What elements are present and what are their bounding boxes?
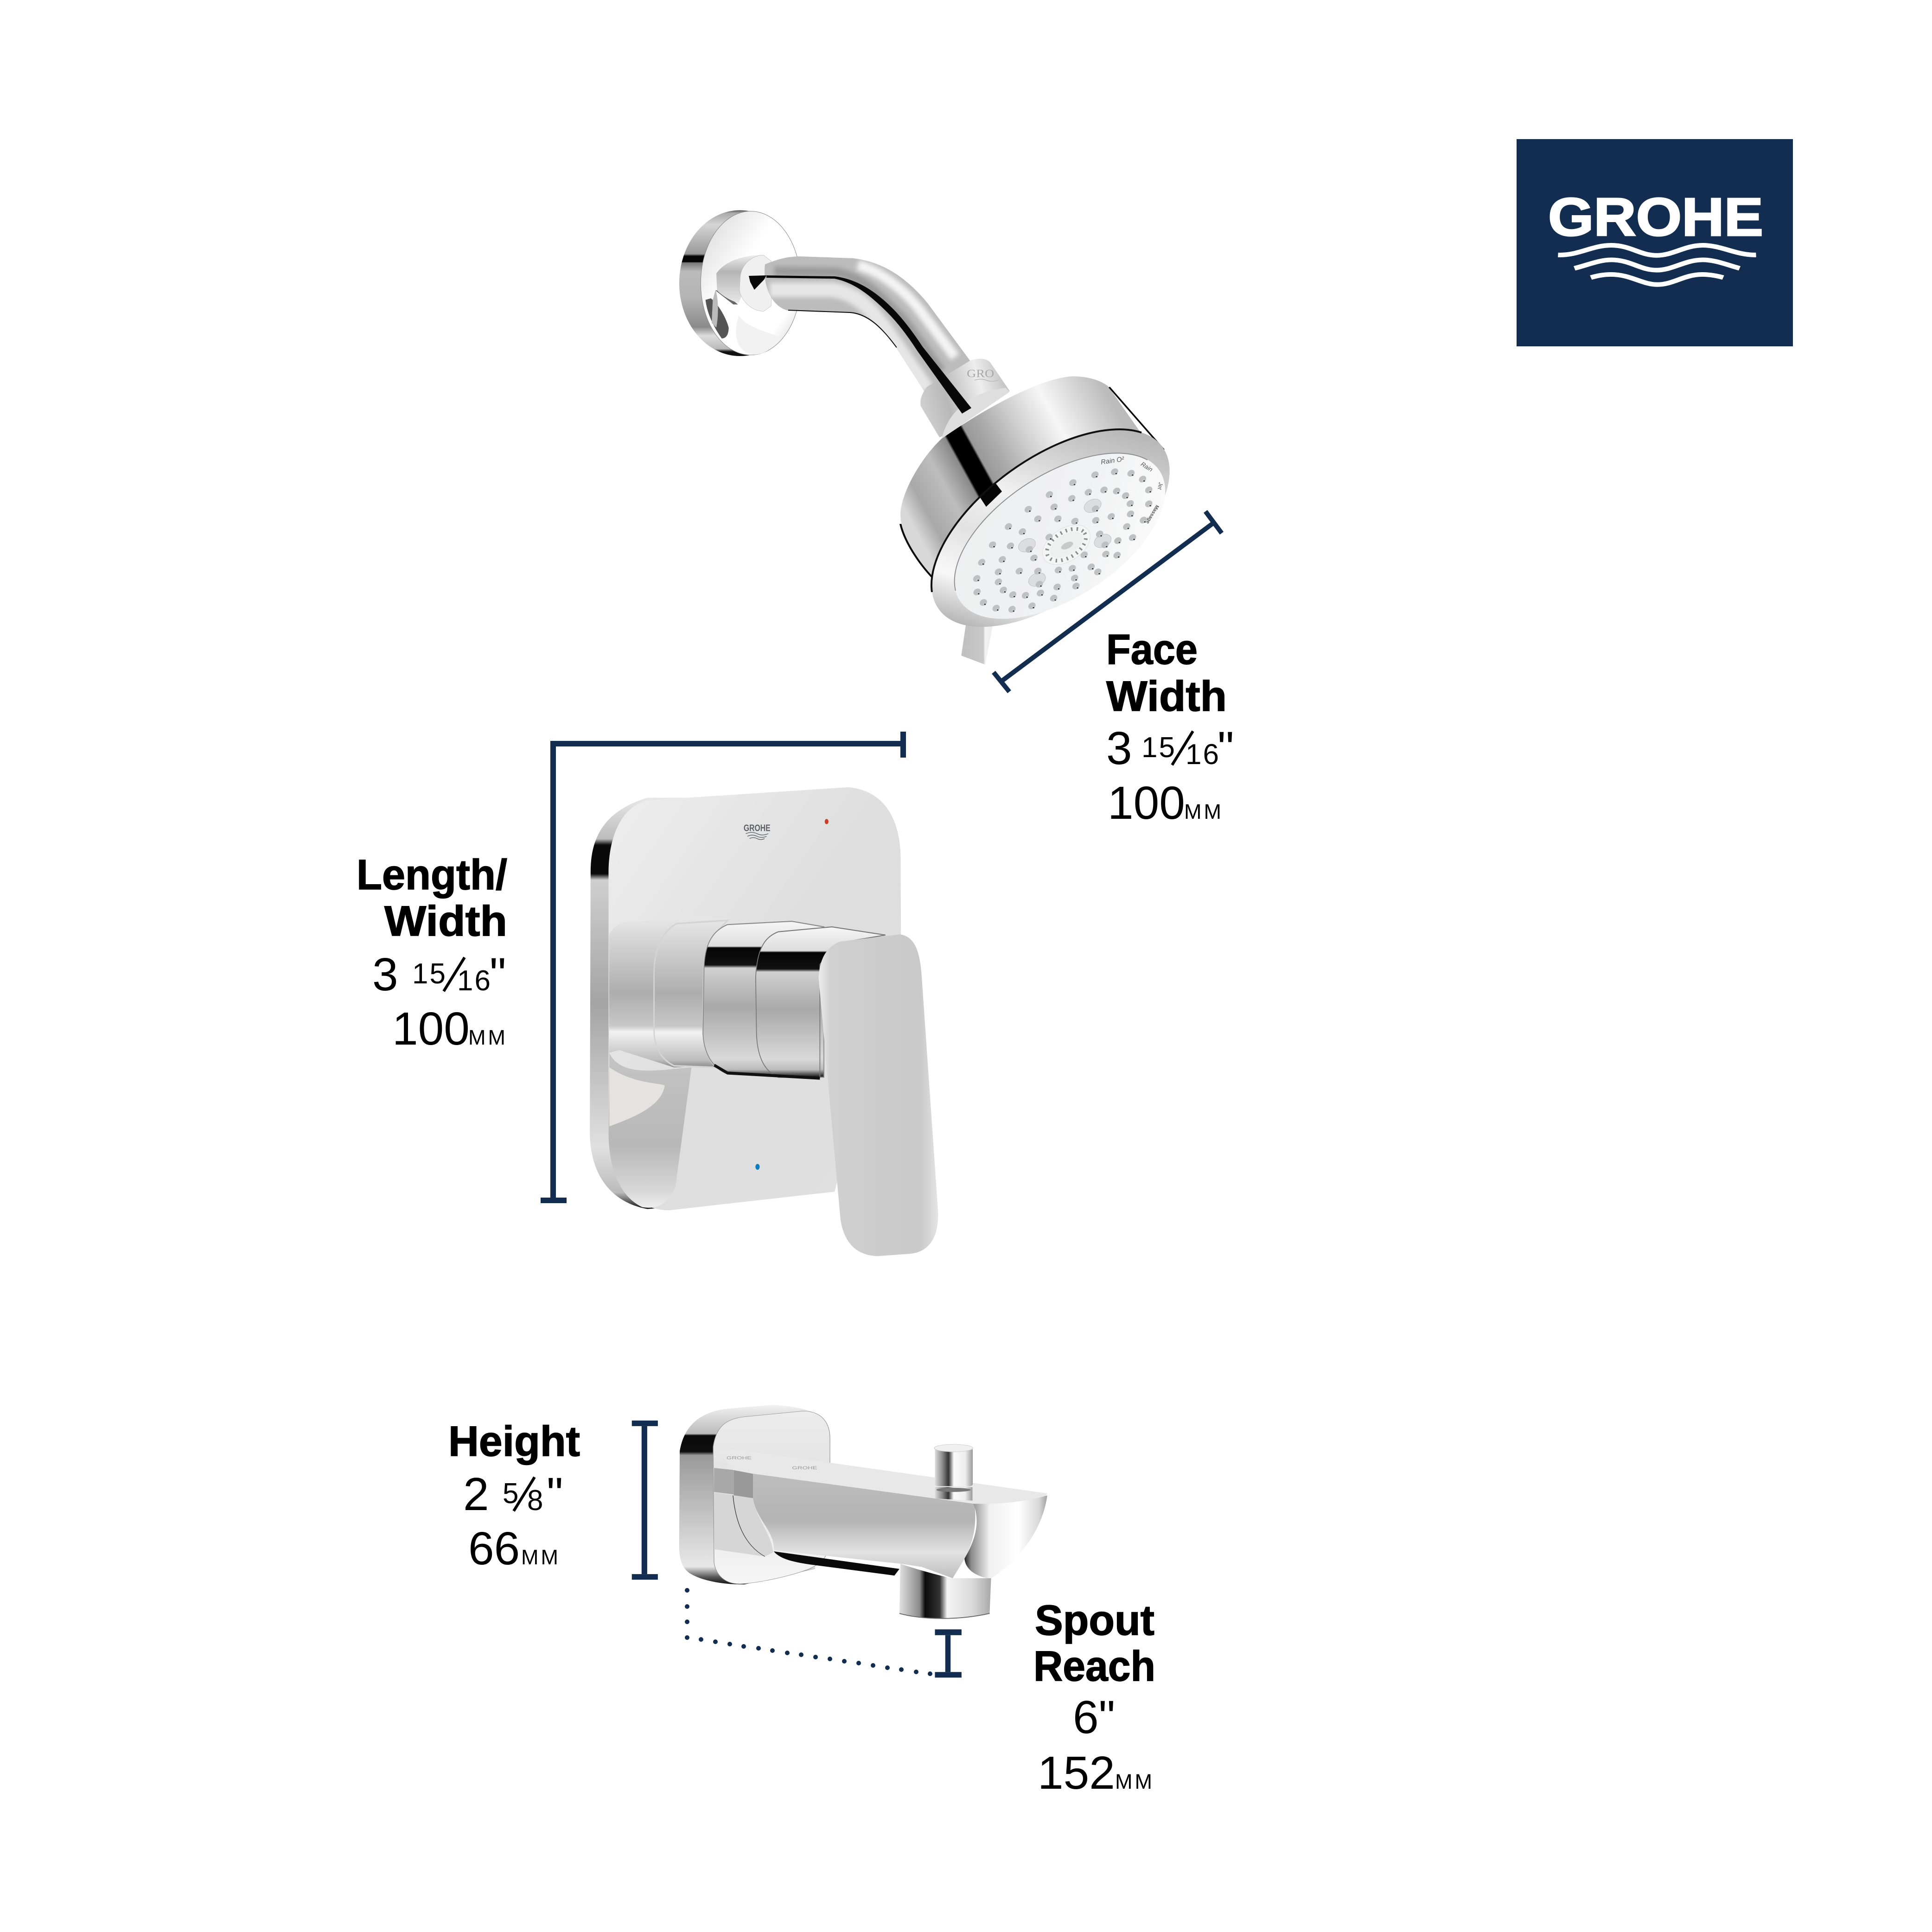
spout end cap bbox=[964, 1495, 1047, 1579]
imperial value bbox=[372, 949, 506, 1001]
centre nozzle ring bbox=[1035, 517, 1097, 573]
spray mode labels bbox=[1100, 456, 1164, 525]
brand mark on plate: GROHE bbox=[744, 823, 771, 833]
metric value: MM bbox=[521, 1545, 561, 1569]
rim seam line bbox=[931, 429, 1141, 592]
logo waves bbox=[1558, 245, 1756, 285]
arm reflection stripe bbox=[766, 275, 971, 414]
heading: Reach bbox=[1033, 1643, 1155, 1690]
imperial value: " bbox=[547, 1468, 563, 1520]
metric value bbox=[1038, 1747, 1154, 1799]
large jet nozzles bbox=[1016, 497, 1113, 589]
cold indicator bbox=[755, 1164, 760, 1170]
logo: GROHE badge bbox=[1517, 139, 1793, 346]
logo background bbox=[1517, 139, 1793, 346]
collar with engraved brand bbox=[920, 359, 1010, 439]
metric value: 66 bbox=[468, 1523, 520, 1575]
spray mode labels: Massage bbox=[1145, 504, 1160, 525]
imperial value: 15 bbox=[1141, 732, 1175, 764]
logo wordmark: GROHE bbox=[1548, 187, 1763, 247]
heading: Width bbox=[384, 898, 507, 945]
metric value bbox=[392, 1003, 508, 1055]
imperial value: " bbox=[1218, 722, 1234, 774]
imperial value: 8 bbox=[527, 1485, 543, 1517]
spout top face: GROHE bbox=[727, 1456, 752, 1460]
rim reflection band bbox=[978, 484, 1002, 507]
imperial value: " bbox=[490, 949, 506, 1001]
dimension line: spout reach bbox=[935, 1629, 962, 1677]
imperial value: 15 bbox=[412, 958, 446, 990]
heading bbox=[1106, 626, 1227, 720]
shower arm bbox=[749, 256, 972, 396]
metric value: 100 bbox=[392, 1003, 470, 1055]
heading: Length/ bbox=[357, 851, 507, 899]
metric value bbox=[468, 1523, 561, 1575]
handle hub bbox=[756, 927, 886, 1077]
collar with engraved brand: GRO bbox=[967, 367, 994, 380]
label: face width bbox=[1106, 626, 1234, 829]
reflection below body bbox=[609, 1053, 691, 1208]
shower head face plate bbox=[926, 419, 1193, 652]
heading: Height bbox=[448, 1418, 580, 1465]
spout top face: GROHE bbox=[792, 1466, 817, 1470]
metric value: MM bbox=[1115, 1770, 1154, 1793]
heading bbox=[357, 851, 507, 945]
imperial value: 16 bbox=[457, 965, 491, 997]
heading: Face bbox=[1106, 626, 1198, 673]
lever handle bbox=[818, 934, 938, 1256]
product: pressure balance valve trim bbox=[590, 787, 938, 1256]
label: length and width bbox=[357, 851, 508, 1055]
imperial value: 3 bbox=[372, 949, 398, 1001]
spout side bbox=[753, 1474, 976, 1578]
wall flange bbox=[679, 210, 801, 356]
body collar bbox=[703, 921, 824, 1077]
imperial value: 5 bbox=[503, 1478, 518, 1510]
metric value: MM bbox=[468, 1026, 508, 1049]
label: height bbox=[448, 1418, 580, 1575]
metric value: MM bbox=[1184, 800, 1224, 823]
imperial value: 3 bbox=[1106, 722, 1132, 774]
wall plate face bbox=[713, 1411, 830, 1584]
dotted reach guide bbox=[685, 1588, 932, 1676]
imperial value: 2 bbox=[463, 1468, 489, 1520]
spray mode labels: Rain bbox=[1140, 460, 1154, 473]
dimension line: height bbox=[632, 1421, 658, 1580]
imperial value bbox=[1106, 722, 1234, 774]
dimension line: face width bbox=[994, 511, 1222, 692]
metric value bbox=[1108, 777, 1224, 829]
spray mode labels: Jet bbox=[1156, 481, 1164, 491]
shower head face rim bbox=[898, 390, 1203, 666]
spout top face bbox=[714, 1447, 1047, 1504]
label: spout reach bbox=[1033, 1597, 1155, 1799]
imperial value bbox=[463, 1468, 563, 1520]
hot indicator bbox=[825, 819, 829, 824]
spray mode labels: Rain O² bbox=[1100, 456, 1125, 466]
body underside shadow bbox=[714, 1065, 820, 1078]
escutcheon face bbox=[609, 787, 901, 1210]
plate edge line bbox=[955, 453, 1148, 591]
body sleeve bbox=[654, 920, 727, 1067]
brand mark on plate bbox=[744, 823, 771, 840]
imperial value: 6" bbox=[1073, 1691, 1115, 1743]
heading: Width bbox=[1106, 673, 1227, 720]
outlet bbox=[899, 1564, 991, 1619]
heading bbox=[1033, 1597, 1155, 1690]
product: tub spout bbox=[679, 1405, 1047, 1619]
dimension line: length and width bbox=[541, 732, 903, 1200]
imperial value: 16 bbox=[1186, 739, 1219, 771]
metric value: 100 bbox=[1108, 777, 1185, 829]
metric value: 152 bbox=[1038, 1747, 1115, 1799]
body rear section bbox=[609, 918, 727, 1067]
spray nozzles bbox=[972, 467, 1154, 614]
diverter knob bbox=[934, 1444, 973, 1501]
product: shower head and arm bbox=[679, 210, 1203, 666]
wall plate edge bbox=[679, 1405, 815, 1584]
spout underside shadow bbox=[774, 1551, 899, 1575]
spray selector lever bbox=[961, 624, 993, 665]
heading: Spout bbox=[1035, 1597, 1154, 1644]
escutcheon edge bbox=[590, 798, 717, 1209]
shower head body bbox=[900, 376, 1168, 579]
spout neck bbox=[714, 1468, 773, 1556]
